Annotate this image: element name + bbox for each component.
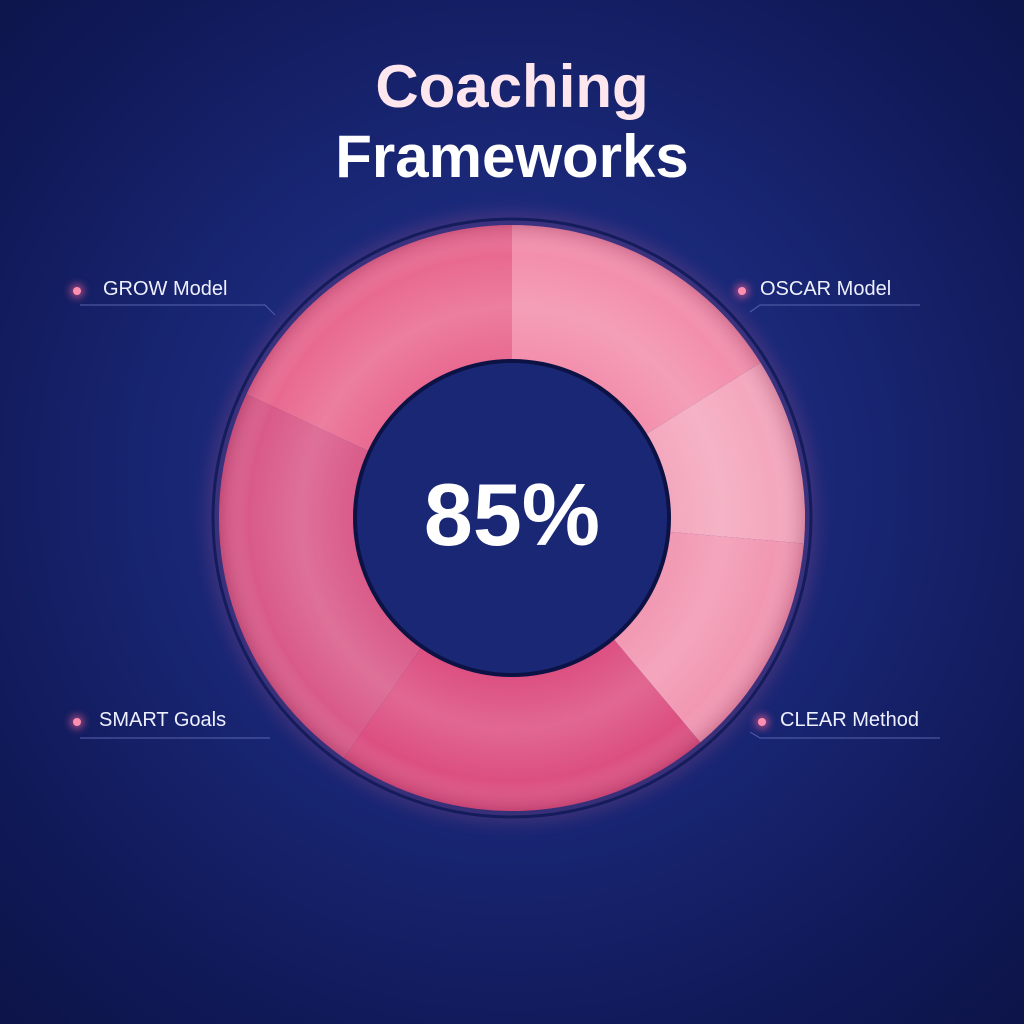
connector lines [80, 305, 940, 738]
donut chart [213, 219, 811, 817]
label: CLEAR Method: CLEAR Method [780, 709, 919, 731]
title: Coaching [375, 53, 649, 120]
center value: 85% [424, 465, 600, 564]
label: SMART Goals: SMART Goals [99, 709, 226, 731]
label: SMART Goals [65, 709, 226, 734]
label: GROW Model: GROW Model [103, 278, 227, 300]
title [335, 53, 689, 190]
label: OSCAR Model: OSCAR Model [760, 278, 891, 300]
title: Frameworks [335, 123, 689, 190]
label: GROW Model [65, 278, 227, 303]
